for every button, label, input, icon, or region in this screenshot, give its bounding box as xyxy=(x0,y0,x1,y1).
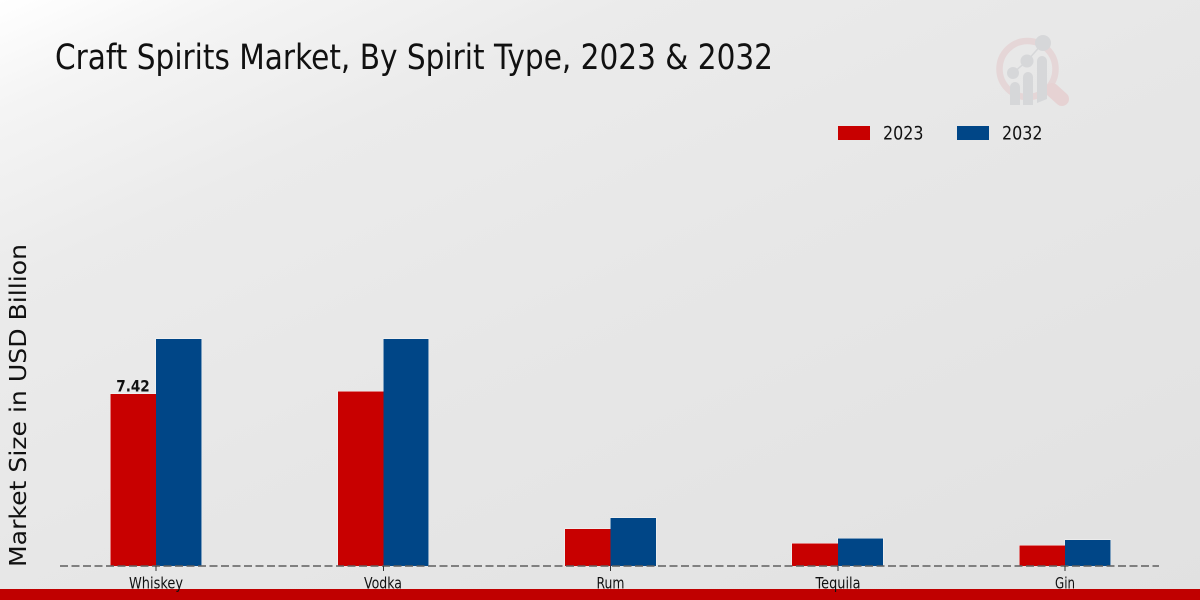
bars: Gin xyxy=(1019,540,1111,566)
title: Craft Spirits Market, By Spirit Type, 2023 & 2032 xyxy=(55,38,773,78)
category labels: Rum xyxy=(596,574,624,592)
category labels: Gin xyxy=(1055,574,1075,592)
footer bar xyxy=(0,589,1200,600)
icon: watermark logo xyxy=(1000,35,1062,105)
bars: Whiskey xyxy=(110,338,202,566)
data label 7.42: 7.42 xyxy=(116,377,150,396)
x axis baseline xyxy=(60,565,1159,567)
bars: Rum xyxy=(564,518,656,566)
legend swatch 2032 xyxy=(957,126,989,140)
bars: Tequila xyxy=(792,538,884,566)
category labels xyxy=(129,574,1075,592)
category labels: Whiskey xyxy=(129,574,183,592)
category labels: Tequila xyxy=(815,574,860,592)
y axis label: Market Size in USD Billion xyxy=(4,244,32,567)
legend swatch 2023 xyxy=(838,126,870,140)
legend label 2023: 2023 xyxy=(883,122,924,144)
bar chart xyxy=(60,338,1159,571)
legend xyxy=(838,122,1042,144)
category labels: Vodka xyxy=(364,574,402,592)
bars: Vodka xyxy=(338,338,429,566)
legend label 2032: 2032 xyxy=(1002,122,1042,144)
axis ticks xyxy=(156,566,1065,571)
